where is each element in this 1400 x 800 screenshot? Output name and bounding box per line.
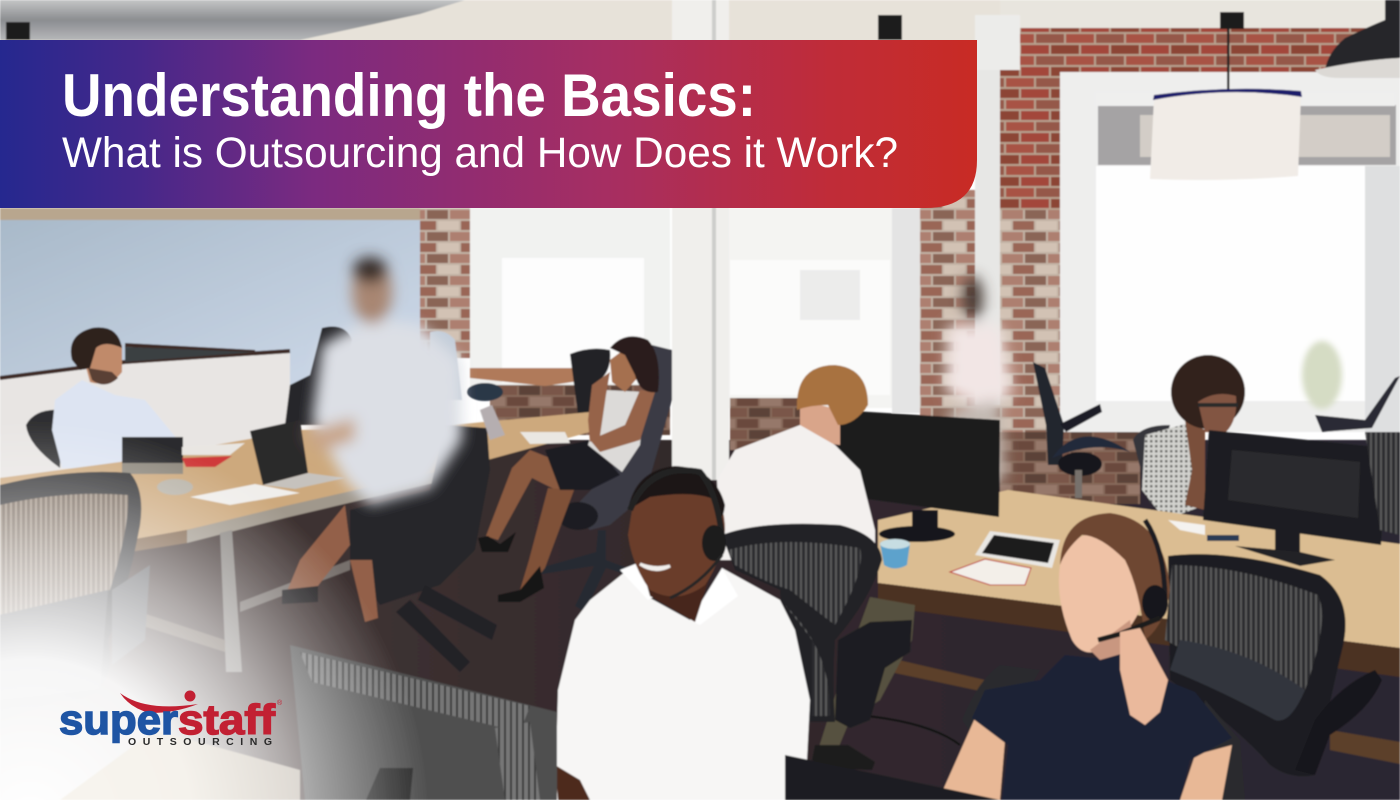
cream desk corner: [60, 730, 300, 800]
navy office chair: [1033, 362, 1130, 498]
desk bottom beam: [890, 658, 985, 692]
man from behind: [717, 365, 875, 560]
logo dot: [184, 690, 196, 702]
blue coffee cup: [880, 539, 910, 568]
navy top: [972, 650, 1232, 800]
white structural column: [672, 0, 729, 480]
right monitor: [1203, 430, 1387, 566]
floor: [0, 440, 1400, 800]
ventilation duct: [0, 0, 465, 40]
window centre: [728, 208, 920, 408]
subtitle: What is Outsourcing and How Does it Work?: [62, 129, 898, 177]
hair: [610, 336, 659, 392]
heels: [478, 532, 544, 602]
rear leg: [520, 488, 574, 592]
top: [588, 390, 645, 472]
left desk edge: [187, 462, 480, 543]
notebook: [950, 559, 1031, 585]
face: [1059, 535, 1145, 652]
registered mark: ®: [277, 699, 283, 707]
blurred walking person: [305, 257, 462, 505]
seated person in dark jacket: [285, 326, 352, 425]
white fade overlay: [0, 400, 470, 800]
blurred walking woman: [946, 276, 1012, 490]
chair: [1133, 425, 1170, 505]
outsourcing wordmark: OUTSOURCING: [128, 736, 272, 748]
woman's back chair: [962, 665, 1245, 800]
shirt: [717, 425, 875, 560]
right of left desk items: [480, 405, 505, 440]
hair: [71, 327, 122, 370]
window sill brick centre: [730, 398, 820, 450]
microphone: [1098, 618, 1160, 640]
right desk front edge: [878, 583, 1400, 677]
neck shadow: [1090, 620, 1135, 660]
laptop: [250, 420, 345, 489]
chair behind woman in front: [1165, 554, 1382, 776]
papers on left desk: [190, 484, 300, 505]
smile: [640, 564, 670, 570]
brick wall below large window: [1000, 432, 1140, 504]
desk leg: [220, 530, 242, 672]
face: [628, 477, 725, 596]
chair behind right monitor: [1365, 432, 1400, 535]
eyeglasses: [1198, 403, 1238, 407]
back desk: [470, 368, 600, 386]
legs under front chair: [815, 597, 915, 768]
glasses case: [157, 479, 193, 495]
armrest: [1295, 670, 1382, 775]
right desk: [878, 490, 1400, 648]
shirt: [555, 568, 810, 800]
walking person's chair: [350, 425, 497, 672]
brick column left: [420, 208, 472, 358]
tablet on stand: [122, 437, 183, 474]
bottom left monitor: [290, 645, 557, 800]
right brick wall: [920, 190, 1080, 500]
blurred walking person legs: [285, 505, 378, 622]
superstaff logo: [59, 690, 283, 748]
super wordmark: super: [59, 696, 178, 743]
chair of bearded man: [26, 410, 62, 468]
black chair behind headset man: [722, 524, 912, 728]
arms: [943, 718, 1232, 800]
plant: [1302, 341, 1342, 409]
earpiece: [702, 525, 726, 561]
air conditioner column: [975, 60, 1000, 405]
beard: [88, 368, 118, 385]
skin: [1185, 420, 1205, 510]
hair: [797, 365, 868, 425]
paper by right monitor: [1168, 520, 1205, 535]
staff wordmark: staff: [178, 696, 276, 743]
torso: [1142, 424, 1205, 520]
far right chair: [1315, 376, 1400, 432]
centre monitor: [838, 410, 1000, 542]
hand: [555, 765, 590, 800]
hair: [628, 466, 725, 516]
seated woman chair: [540, 345, 672, 612]
window left: [470, 208, 670, 388]
neck and face: [80, 338, 122, 384]
title: Understanding the Basics:: [62, 62, 756, 129]
partition top rail: [0, 345, 290, 378]
ceiling beam right: [1000, 0, 1400, 28]
front leg: [486, 450, 590, 540]
window sill brick left: [490, 385, 670, 435]
black pendant lamp: [1325, 0, 1400, 70]
banner shape: [0, 40, 977, 208]
tablet on desk: [975, 531, 1060, 568]
hanging lamp stems: [6, 15, 902, 40]
neck: [640, 560, 715, 622]
headband: [630, 470, 722, 535]
woman with headset: [943, 513, 1232, 800]
brick ledge: [0, 208, 420, 220]
title banner: [0, 40, 977, 208]
foreground left chair: [0, 472, 150, 720]
hand: [1120, 628, 1168, 725]
back chair: [430, 331, 610, 415]
seated woman: [478, 336, 659, 602]
large window: [1060, 72, 1400, 432]
partition wall: [0, 352, 290, 478]
glasses on desk: [1207, 535, 1239, 541]
headset: [1145, 520, 1165, 600]
swoosh: [120, 693, 198, 713]
sneaker: [812, 745, 875, 770]
hair: [1171, 355, 1245, 429]
face: [610, 345, 640, 392]
ceiling: [0, 0, 1400, 60]
headset man: [555, 466, 810, 800]
red folder and papers: [182, 443, 245, 467]
cables: [858, 715, 960, 745]
skirt: [545, 440, 620, 490]
microphone boom: [670, 555, 722, 598]
back wall blue: [0, 208, 422, 388]
curly haired woman: [1133, 355, 1245, 520]
left desk: [0, 412, 590, 545]
face: [1198, 394, 1236, 432]
shirt: [52, 380, 178, 470]
bottom centre monitor: [785, 755, 1000, 800]
pendant lamp shade: [1150, 12, 1302, 180]
hair: [1060, 513, 1170, 640]
neck: [800, 400, 840, 445]
bearded man: [52, 327, 178, 470]
arm: [588, 372, 655, 452]
